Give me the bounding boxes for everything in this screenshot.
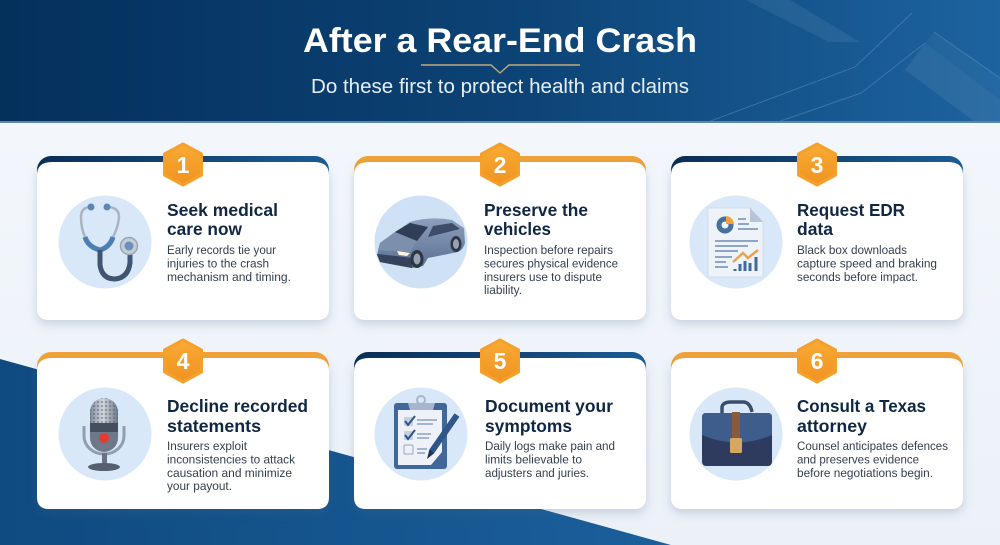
number badge <box>482 340 518 382</box>
card body <box>354 358 646 509</box>
number badge: 5 <box>494 348 507 374</box>
step description <box>485 439 615 480</box>
step heading: Document your <box>485 396 613 416</box>
card body <box>671 358 963 509</box>
page background <box>0 122 1000 545</box>
number badge <box>798 144 836 185</box>
step heading: Decline recorded <box>167 396 308 416</box>
number badge <box>164 144 202 185</box>
step description: insurers use to dispute <box>484 270 602 284</box>
step description: causation and minimize <box>167 466 292 480</box>
card accent top <box>37 156 329 196</box>
panel: step 1 seek medical care <box>37 144 329 320</box>
step description <box>797 243 937 284</box>
step description: limits believable to <box>485 452 582 466</box>
step description: inconsistencies to attack <box>167 452 296 466</box>
subtitle: Do these first to protect health and claims <box>311 76 689 98</box>
card accent top <box>37 352 329 392</box>
panel: step 2 preserve the vehicles <box>354 144 646 320</box>
step description: Daily logs make pain and <box>485 439 615 453</box>
step heading: Consult a Texas <box>797 396 926 416</box>
icon: microphone <box>58 388 152 480</box>
card accent top <box>354 352 646 392</box>
step heading: data <box>797 219 833 239</box>
card accent top <box>671 156 963 196</box>
card body <box>354 162 646 320</box>
panel: step 6 consult a Texas attorney <box>671 340 963 509</box>
step heading: Preserve the <box>484 200 588 220</box>
step heading <box>484 200 588 239</box>
step description: adjusters and juries. <box>485 466 589 480</box>
step heading <box>485 396 613 436</box>
panel: step 4 decline recorded statements <box>37 340 329 509</box>
step heading: care now <box>167 219 242 239</box>
step heading: statements <box>167 416 261 436</box>
step heading <box>167 200 278 239</box>
step description <box>167 439 296 493</box>
step heading <box>167 396 308 436</box>
number badge: 4 <box>177 348 190 374</box>
step description: your payout. <box>167 479 232 493</box>
card body <box>37 358 329 509</box>
step description: seconds before impact. <box>797 270 918 284</box>
number badge: 3 <box>811 152 823 178</box>
step description: Insurers exploit <box>167 439 248 453</box>
step description: and preserves evidence <box>797 452 919 466</box>
card accent top <box>354 156 646 196</box>
step description: Early records tie your <box>167 243 276 257</box>
step description: Black box downloads <box>797 243 907 257</box>
step heading: symptoms <box>485 416 572 436</box>
bottom blue diagonal shape <box>0 359 671 545</box>
step heading <box>797 396 926 436</box>
number badge: 6 <box>811 348 823 374</box>
gold divider line <box>421 65 580 73</box>
number badge: 1 <box>177 152 190 178</box>
step description: capture speed and braking <box>797 256 937 270</box>
icon: briefcase <box>690 388 782 480</box>
number badge <box>164 340 202 382</box>
icon: stethoscope <box>58 196 152 288</box>
step description: secures physical evidence <box>484 256 618 270</box>
step heading: Request EDR <box>797 200 905 220</box>
step description <box>797 439 948 480</box>
panel: step 5 document your symptoms <box>354 340 646 509</box>
step description <box>484 243 618 297</box>
card body <box>671 162 963 320</box>
panel: step 3 request EDR data <box>671 144 963 320</box>
card accent top <box>671 352 963 392</box>
step heading: attorney <box>797 416 867 436</box>
number badge <box>482 144 518 185</box>
step description: Inspection before repairs <box>484 243 613 257</box>
step description: injuries to the crash <box>167 256 269 270</box>
title: After a Rear-End Crash <box>303 22 697 60</box>
step description <box>167 243 291 284</box>
step description: Counsel anticipates defences <box>797 439 948 453</box>
header banner <box>0 0 1000 123</box>
step heading <box>797 200 905 239</box>
card body <box>37 162 329 320</box>
step heading: Seek medical <box>167 200 278 220</box>
step description: liability. <box>484 283 522 297</box>
icon: clipboard checklist <box>374 388 468 480</box>
number badge: 2 <box>494 152 506 178</box>
icon: data report <box>690 196 782 288</box>
number badge <box>798 340 836 382</box>
step heading: vehicles <box>484 219 551 239</box>
step description: before negotiations begin. <box>797 466 933 480</box>
icon: car <box>374 196 468 288</box>
step description: mechanism and timing. <box>167 270 291 284</box>
